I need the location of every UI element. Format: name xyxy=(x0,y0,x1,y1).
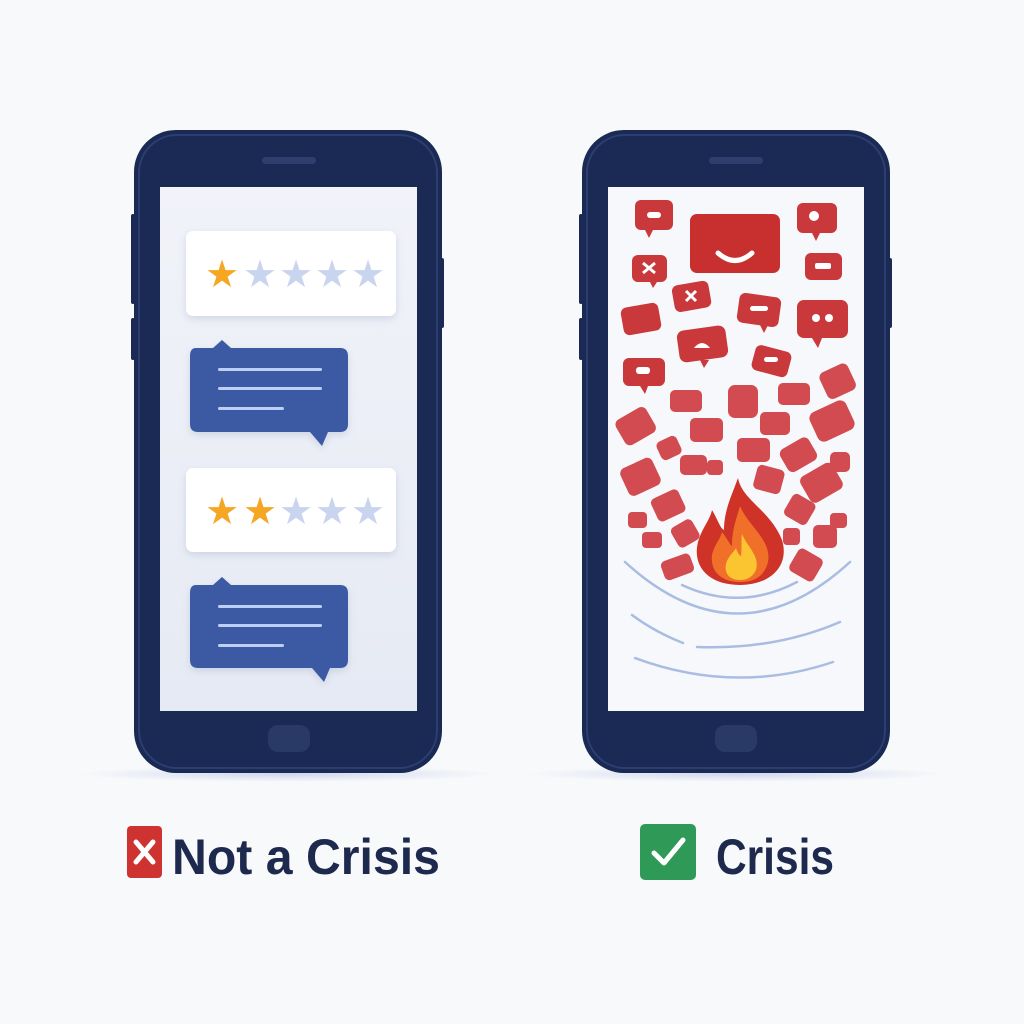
card: 1-star review: ★ xyxy=(205,252,239,296)
message bubble 1 xyxy=(190,340,348,446)
card: 2-star review: ★ xyxy=(351,489,385,533)
phone: not a crisis xyxy=(78,130,498,782)
red comment bubbles xyxy=(620,200,848,394)
card: 2-star review: ★ xyxy=(205,489,239,533)
card: 1-star review xyxy=(186,231,396,316)
card: 2-star review: ★ xyxy=(279,489,313,533)
icon: fire xyxy=(697,478,784,585)
label: not a crisis: Not a Crisis xyxy=(172,829,440,885)
message bubble 2 xyxy=(190,577,348,682)
card: 2-star review xyxy=(186,468,396,552)
card: 1-star review: ★ xyxy=(351,252,385,296)
phone: crisis xyxy=(526,130,946,782)
screen: flood of angry comments xyxy=(608,187,864,711)
sound waves xyxy=(625,562,850,678)
card: 1-star review: ★ xyxy=(243,252,277,296)
white face marks xyxy=(636,211,833,374)
label: crisis: Crisis xyxy=(716,829,834,885)
card: 1-star review: ★ xyxy=(315,252,349,296)
card: 2-star review: ★ xyxy=(243,489,277,533)
card: 2-star review: ★ xyxy=(315,489,349,533)
big angry message xyxy=(690,214,780,273)
card: 1-star review: ★ xyxy=(279,252,313,296)
label: crisis xyxy=(640,824,834,885)
screen: reviews xyxy=(160,187,417,711)
